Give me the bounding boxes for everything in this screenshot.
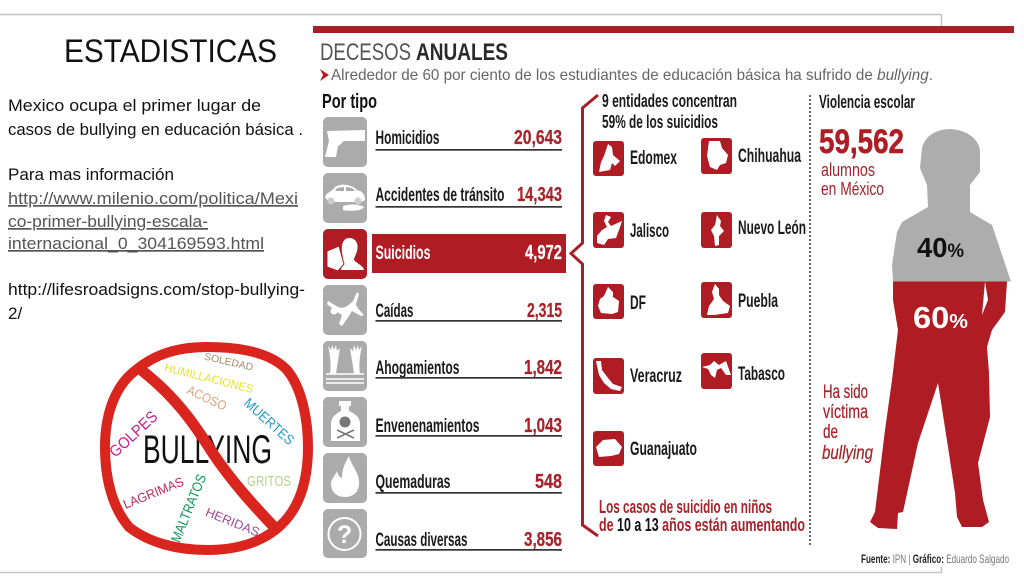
silhouette: red part bbox=[870, 282, 1007, 529]
text block: intro: casos de bullying en educación básica . bbox=[8, 120, 303, 139]
word: HUMILLACIONES: HUMILLACIONES bbox=[163, 362, 255, 396]
row: accidentes bbox=[323, 173, 562, 223]
top red bar bbox=[313, 26, 1014, 33]
icon: Veracruz map bbox=[593, 358, 624, 394]
icon: Jalisco map bbox=[593, 212, 624, 248]
heading: decesos anuales: DECESOS bbox=[320, 39, 411, 66]
state: Tabasco: Tabasco bbox=[738, 364, 785, 385]
row: quemaduras: 548 bbox=[535, 471, 562, 493]
sign word: BULLYING: BULLYING bbox=[143, 428, 272, 472]
silhouette chart: 40% / 60% bbox=[870, 129, 1011, 529]
text block: ha sido victima: víctima bbox=[823, 402, 868, 423]
row: suicidios highlighted: Suicidios bbox=[376, 243, 430, 264]
stat: 59,562 alumnos: alumnos bbox=[821, 159, 875, 180]
word: SOLEDAD: SOLEDAD bbox=[203, 352, 254, 374]
state: Edomex bbox=[593, 141, 677, 176]
icon: question mark bbox=[323, 509, 367, 558]
state: Chihuahua bbox=[701, 138, 801, 174]
bullying prohibition sign bbox=[105, 347, 308, 550]
row: homicidios: Homicidios bbox=[376, 128, 440, 149]
text block: intro: Mexico ocupa el primer lugar de bbox=[8, 96, 261, 115]
text block: links bbox=[8, 165, 305, 323]
icon: Guanajuato map bbox=[593, 431, 624, 466]
row: suicidios highlighted bbox=[323, 229, 566, 279]
icon: Chihuahua map bbox=[701, 138, 732, 174]
row: causas diversas: 3,856 bbox=[524, 529, 562, 551]
icon: question mark: ? bbox=[337, 521, 352, 549]
icon: DF map bbox=[593, 284, 624, 319]
row: ahogamientos: 1,842 bbox=[524, 357, 562, 379]
row: caidas: 2,315 bbox=[527, 300, 562, 322]
stat: 59,562 alumnos bbox=[819, 123, 904, 199]
callout: suicide cases in children: de 10 a 13 años están aumentando bbox=[599, 514, 805, 535]
text block: ha sido victima: de bbox=[823, 422, 838, 443]
state: Puebla bbox=[701, 282, 778, 318]
word: LAGRIMAS: LAGRIMAS bbox=[121, 474, 186, 512]
state: Veracruz: Veracruz bbox=[630, 366, 682, 387]
icon: flame bbox=[323, 453, 367, 503]
text block: intro bbox=[8, 96, 303, 139]
title: ESTADISTICAS bbox=[64, 33, 277, 69]
text block: links: 2/ bbox=[8, 304, 22, 323]
heading: decesos anuales: ANUALES bbox=[416, 39, 508, 66]
icon: suicide bbox=[323, 229, 367, 279]
text block: links: Para mas información bbox=[8, 165, 174, 184]
row: caidas: Caídas bbox=[376, 301, 414, 322]
sign ring bbox=[105, 347, 308, 550]
heading: 9 entidades: 59% de los suicidios bbox=[602, 111, 718, 132]
word: ACOSO: ACOSO bbox=[185, 382, 229, 414]
callout: suicide cases in children: Los casos de suicidio en niños bbox=[599, 496, 772, 517]
state: Jalisco bbox=[593, 212, 669, 248]
state: Tabasco bbox=[701, 353, 785, 389]
heading: decesos anuales bbox=[320, 39, 508, 66]
row: causas diversas: Causas diversas bbox=[376, 530, 468, 551]
row: quemaduras bbox=[323, 453, 562, 503]
row: suicidios highlighted: 4,972 bbox=[525, 242, 562, 264]
text block: links: internacional_0_304169593.html bbox=[8, 234, 264, 253]
row: accidentes: 14,343 bbox=[517, 184, 562, 206]
state: DF bbox=[593, 284, 646, 319]
subtitle: Alrededor de 60 por ciento de los estudiantes de educación básica ha sufrido de bullying. bbox=[331, 67, 933, 84]
word: HERIDAS: HERIDAS bbox=[203, 505, 262, 539]
icon: falling person bbox=[323, 285, 367, 335]
bracket arrow bbox=[571, 95, 598, 536]
text block: ha sido victima: Ha sido bbox=[823, 382, 868, 403]
word: GRITOS: GRITOS bbox=[247, 474, 291, 490]
row: causas diversas bbox=[323, 509, 562, 558]
text block: links: http://lifesroadsigns.com/stop-bullying- bbox=[8, 280, 305, 299]
icon: Tabasco map bbox=[701, 353, 732, 389]
row: ahogamientos: Ahogamientos bbox=[376, 358, 460, 379]
icon: Nuevo Leon map bbox=[701, 212, 732, 248]
state: Chihuahua: Chihuahua bbox=[738, 146, 801, 167]
text block: ha sido victima bbox=[822, 382, 873, 464]
icon: drowning hands bbox=[323, 341, 367, 391]
heading: 9 entidades bbox=[602, 90, 737, 132]
state: Nuevo Leon bbox=[701, 212, 806, 248]
value: 40%: 40% bbox=[917, 232, 964, 263]
icon: Edomex map bbox=[593, 141, 624, 176]
row: envenenamientos bbox=[323, 397, 562, 447]
sign diagonal bbox=[136, 366, 277, 530]
icon: Puebla map bbox=[701, 282, 732, 318]
row: accidentes: Accidentes de tránsito bbox=[376, 185, 504, 206]
row: ahogamientos bbox=[323, 341, 562, 391]
stat: 59,562 alumnos: 59,562 bbox=[819, 123, 904, 161]
state: Edomex: Edomex bbox=[630, 148, 677, 169]
row: caidas bbox=[323, 285, 562, 335]
state: Nuevo Leon: Nuevo León bbox=[738, 218, 806, 239]
callout: suicide cases in children bbox=[599, 496, 805, 535]
text block: links: http://www.milenio.com/politica/Mexi bbox=[8, 189, 298, 208]
text block: links: co-primer-bullying-escala- bbox=[8, 212, 208, 231]
silhouette: grey part bbox=[892, 129, 1011, 282]
state: Guanajuato bbox=[593, 431, 697, 466]
row: envenenamientos: Envenenamientos bbox=[376, 416, 480, 437]
word: GOLPES: GOLPES bbox=[107, 408, 161, 461]
word: MALTRATOS: MALTRATOS bbox=[167, 472, 209, 545]
heading: por tipo: Por tipo bbox=[322, 91, 377, 113]
state: Guanajuato: Guanajuato bbox=[630, 439, 697, 460]
icon: poison bottle bbox=[323, 397, 367, 447]
word: MUERTES: MUERTES bbox=[241, 395, 298, 448]
heading: violencia escolar: Violencia escolar bbox=[819, 92, 915, 112]
row: quemaduras: Quemaduras bbox=[376, 472, 450, 493]
state: Jalisco: Jalisco bbox=[630, 221, 669, 242]
stat: 59,562 alumnos: en México bbox=[821, 178, 884, 199]
icon: car bbox=[323, 173, 367, 223]
icon: gun bbox=[323, 117, 367, 167]
heading: 9 entidades: 9 entidades concentran bbox=[602, 90, 737, 111]
state: DF: DF bbox=[630, 293, 646, 314]
row: envenenamientos: 1,043 bbox=[524, 415, 562, 437]
row: homicidios: 20,643 bbox=[514, 127, 562, 149]
state: Veracruz bbox=[593, 358, 682, 394]
row: homicidios bbox=[323, 117, 562, 167]
state: Puebla: Puebla bbox=[738, 291, 778, 312]
text block: ha sido victima: bullying bbox=[822, 443, 873, 464]
value: 60%: 60% bbox=[913, 300, 968, 335]
